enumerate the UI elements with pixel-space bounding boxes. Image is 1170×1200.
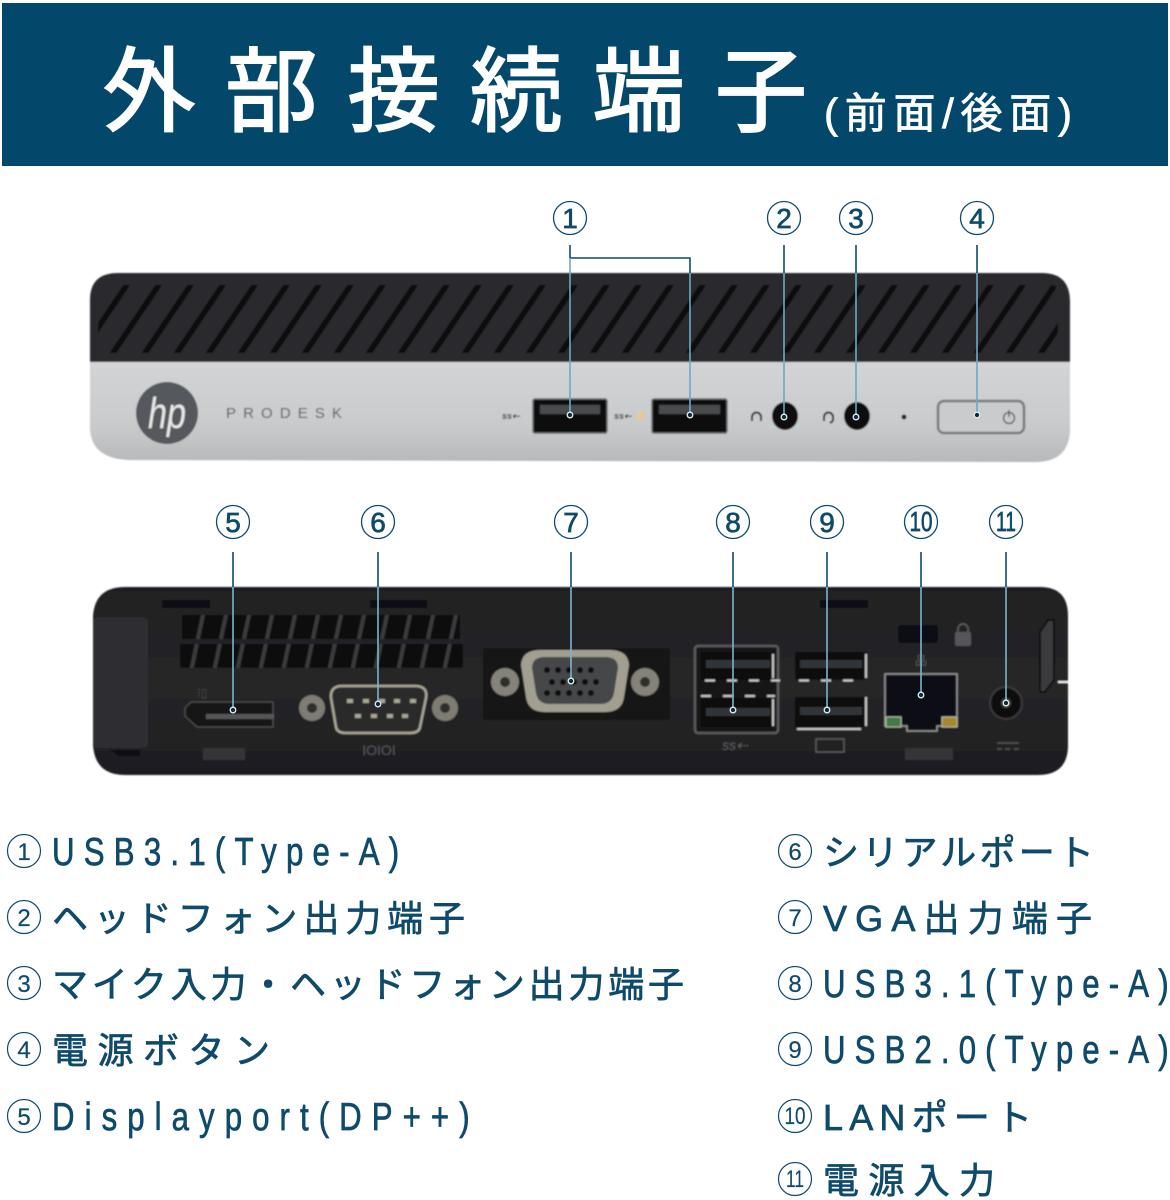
PRODESK label: PRODESK [226, 405, 342, 422]
DisplayPort: ⁝▯ [197, 686, 207, 700]
right side notch [1058, 681, 1069, 683]
headphone jack [752, 402, 798, 430]
serial port [299, 686, 458, 758]
HP logo [136, 382, 198, 444]
legend item 1: 1 [17, 839, 31, 866]
DisplayPort [185, 686, 274, 727]
number badges rear: 6 [370, 507, 386, 538]
legend item 2: 2 [17, 905, 31, 932]
legend item 9: USB2.0(Type-A) [823, 1029, 1169, 1072]
legend right column [778, 832, 1169, 1200]
legend item 10: LANポート [823, 1097, 1032, 1138]
number badges rear: 9 [819, 507, 835, 538]
LAN port: 品 [915, 654, 927, 668]
number badges front [554, 202, 994, 234]
callout lines on rear view [230, 552, 1009, 713]
legend item 7: 7 [788, 905, 802, 932]
right side clip [1040, 620, 1054, 692]
front USB port right: ss⇠ ⚡ [614, 410, 646, 422]
legend item 3: 3 [17, 971, 31, 998]
silver front panel [90, 362, 1070, 462]
number badges rear: 8 [725, 507, 741, 538]
legend left column [8, 831, 684, 1139]
front USB port right [614, 399, 727, 433]
header banner [2, 3, 1168, 166]
legend item 2: ヘッドフォン出力端子 [52, 898, 465, 939]
front chassis [90, 273, 1070, 461]
legend item 1: USB3.1(Type-A) [52, 831, 399, 874]
legend item 11: 電源入力 [823, 1160, 995, 1200]
rear chassis [93, 587, 1068, 775]
front view of PC [90, 273, 1070, 462]
legend item 8: 8 [788, 971, 802, 998]
callout lines on front view [567, 245, 980, 420]
USB 3.1 rear ports [695, 646, 780, 753]
title: 外部接続端子 [103, 42, 807, 144]
indicator hole [902, 414, 906, 420]
legend item 5: Displayport(DP++) [52, 1096, 470, 1139]
legend item 11: 11 [786, 1166, 804, 1193]
serial port: IOIOI [362, 742, 396, 758]
microphone and headphone jack [824, 402, 870, 430]
number badges rear: 7 [563, 507, 579, 538]
USB 2.0 rear ports [795, 652, 867, 752]
USB 3.1 rear ports: ss⇠ [722, 737, 749, 753]
rear vent grille [180, 615, 463, 668]
number badges front: 4 [969, 203, 985, 234]
rear left foot tab [93, 617, 148, 748]
number badges front: 1 [562, 203, 578, 234]
front vent grille [98, 285, 1058, 353]
legend item 8: USB3.1(Type-A) [823, 963, 1169, 1006]
legend item 9: 9 [788, 1037, 802, 1064]
number badges rear: 11 [996, 506, 1016, 537]
legend item 5: 5 [17, 1104, 31, 1131]
number badges rear [216, 506, 1022, 538]
power button [938, 401, 1024, 433]
legend item 4: 4 [17, 1037, 31, 1064]
front USB port left [502, 399, 607, 433]
legend item 3: マイク入力・ヘッドフォン出力端子 [52, 964, 684, 1005]
legend item 6: 6 [788, 839, 802, 866]
power input jack [990, 687, 1022, 749]
legend item 7: VGA出力端子 [823, 898, 1092, 939]
VGA port [483, 648, 670, 720]
lock slot and icon [898, 624, 971, 646]
front USB port left: ss⇠ [502, 411, 521, 421]
number badges rear: 5 [225, 507, 241, 538]
subtitle: (前面/後面) [824, 90, 1072, 137]
HP logo: hp [148, 389, 186, 438]
legend item 10: 10 [784, 1103, 806, 1130]
rear top slots and feet [110, 600, 953, 760]
number badges front: 3 [848, 203, 864, 234]
number badges front: 2 [776, 203, 792, 234]
legend item 4: 電源ボタン [52, 1030, 270, 1071]
rear view of PC [93, 587, 1069, 775]
LAN port [885, 654, 957, 731]
number badges rear: 10 [910, 506, 932, 537]
legend item 6: シリアルポート [823, 832, 1094, 873]
